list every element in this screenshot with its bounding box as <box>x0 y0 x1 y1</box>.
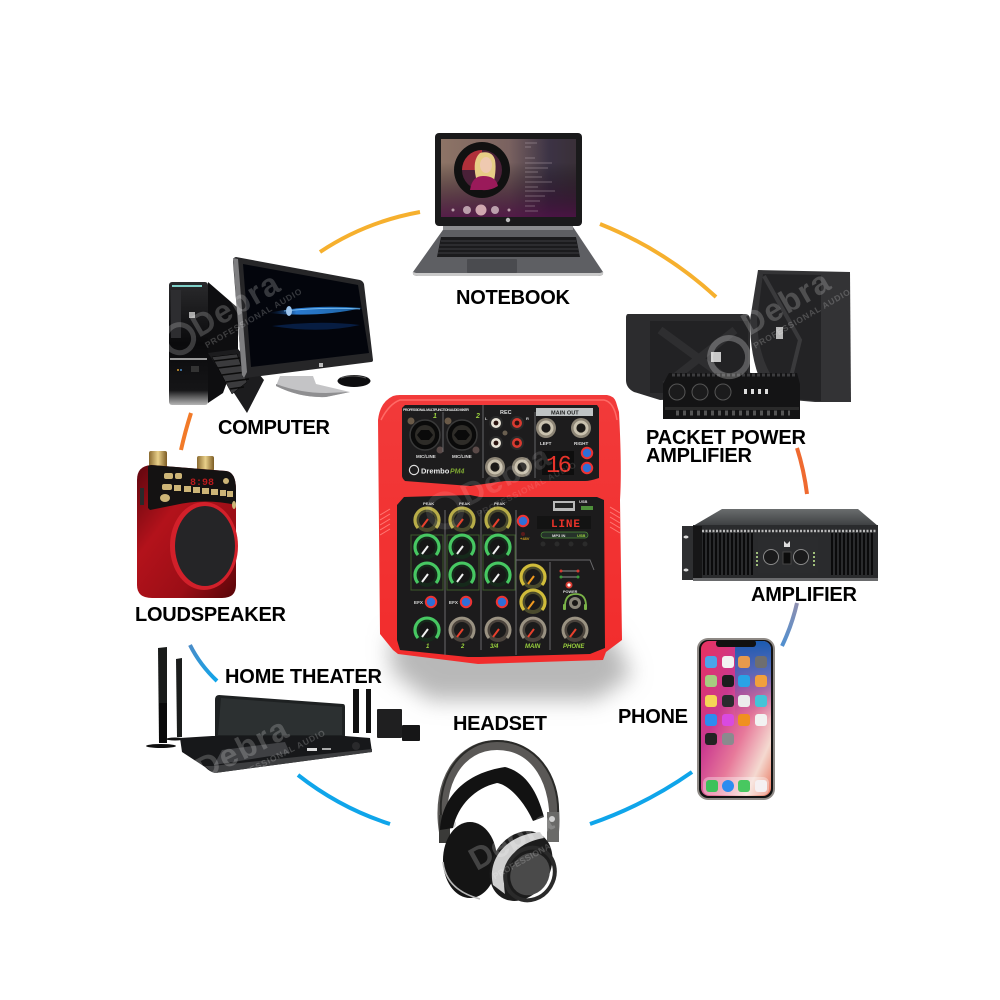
label: phone: PHONE <box>618 706 688 728</box>
headphone jack <box>563 594 587 610</box>
channel labels: 2 <box>460 644 465 650</box>
mp3 switch <box>541 532 588 538</box>
right speaker <box>750 270 851 402</box>
small buttons <box>540 542 546 546</box>
brand <box>409 465 464 476</box>
monitor screen <box>243 264 369 367</box>
watermark: PROFESSIONAL <box>491 838 557 881</box>
device: computer <box>157 257 373 413</box>
watermark: Debra <box>455 438 556 513</box>
watermark <box>157 257 304 366</box>
channel labels: 1 <box>426 644 430 650</box>
watermark <box>694 256 858 383</box>
laptop touchpad <box>467 259 517 273</box>
lower black panel: EFX <box>414 600 424 605</box>
notch <box>716 640 756 647</box>
channel knobs row 1 <box>415 508 439 532</box>
yokes <box>439 815 450 843</box>
tower front <box>169 282 208 405</box>
right ear cup <box>477 819 565 913</box>
watermark: PROFESSIONAL AUDIO <box>475 460 578 519</box>
xlr input 1 <box>408 413 444 454</box>
top black panel: MAIN OUT <box>551 410 579 416</box>
vents <box>704 533 872 575</box>
label: headset: HEADSET <box>453 713 547 735</box>
xlr input 1: 1 <box>433 413 437 420</box>
lower black panel: EFX <box>449 600 459 605</box>
arc: computer to notebook <box>320 212 420 252</box>
app grid <box>705 656 767 745</box>
arc: packet power amplifier to amplifier <box>797 448 807 494</box>
channel labels: MAIN <box>525 644 541 650</box>
track list <box>525 143 555 211</box>
left tower speakers <box>158 647 167 743</box>
line display <box>537 516 591 529</box>
label: packet power amplifier <box>646 427 807 467</box>
left speaker <box>626 314 752 400</box>
right tower speakers <box>353 689 359 733</box>
outer headband <box>442 745 554 832</box>
device: phone <box>697 638 775 800</box>
label: home theater: HOME THEATER <box>225 666 383 688</box>
amp knobs <box>669 384 685 400</box>
top black panel: LEFT <box>540 441 552 446</box>
top black panel: PROFESSIONAL MULTIFUNCTION AUDIO MIXER <box>403 408 469 412</box>
lower black panel: LINE <box>551 519 580 531</box>
device: packet power amplifier <box>626 256 858 419</box>
rec rca jacks: REC <box>500 410 512 416</box>
side slot <box>140 488 144 505</box>
receiver <box>180 736 372 773</box>
peak labels: PEAK <box>423 501 434 506</box>
amp top plate <box>693 509 878 526</box>
label: loudspeaker: LOUDSPEAKER <box>135 604 287 626</box>
laptop screen <box>435 133 582 226</box>
phone body <box>697 638 775 800</box>
laptop base <box>413 227 603 276</box>
watermark: PROFESSIONAL AUDIO <box>203 286 304 350</box>
hp logo <box>506 218 510 222</box>
clip leds <box>561 571 579 577</box>
gold knobs <box>149 451 167 469</box>
watermark: PROFESSIONAL AUDIO <box>751 287 852 351</box>
channel labels: 3/4 <box>490 644 499 650</box>
channel labels <box>426 644 585 650</box>
player buttons <box>463 206 471 214</box>
side grips <box>380 507 620 535</box>
blue button <box>517 515 529 527</box>
inner pad <box>440 767 544 830</box>
usb port <box>553 501 575 511</box>
label: notebook: NOTEBOOK <box>456 287 571 309</box>
monitor stand <box>276 376 350 397</box>
up down buttons <box>581 447 593 459</box>
lower black panel: MP3 IN <box>552 533 565 538</box>
dsp display <box>542 451 574 475</box>
xlr input 2: 2 <box>475 413 480 420</box>
amplifier head <box>663 373 800 419</box>
connection arcs ring <box>181 212 807 824</box>
main out jacks <box>536 418 556 438</box>
phantom: +48V <box>520 536 530 541</box>
label: computer: COMPUTER <box>218 417 331 439</box>
lower black panel: PEAK <box>459 501 470 506</box>
device: notebook <box>413 133 603 276</box>
monitor body <box>233 257 373 378</box>
mouse <box>338 375 370 387</box>
mic line labels: MIC/LINE <box>416 454 436 459</box>
device: amplifier <box>682 509 878 581</box>
laptop keyboard leaning <box>208 349 264 413</box>
channel labels: PHONE <box>563 644 585 650</box>
amp front panel <box>693 525 878 581</box>
arc: amplifier to phone <box>782 603 797 646</box>
divider lines <box>443 405 535 478</box>
label: packet power amplifier: AMPLIFIER <box>646 445 753 467</box>
line jacks <box>485 457 505 477</box>
main out label <box>536 408 593 416</box>
lower black panel: POWER <box>563 590 578 594</box>
channel faders row <box>415 618 439 642</box>
mixer drop shadow <box>390 635 632 700</box>
rack ears <box>682 526 695 580</box>
xlr input 2 <box>444 413 480 454</box>
lower black panel: USB <box>579 499 588 504</box>
album disc <box>454 142 510 198</box>
tower side <box>208 282 238 403</box>
brand: PM4 <box>450 468 464 476</box>
watermark: Debra <box>463 802 559 877</box>
wallpaper <box>701 641 771 796</box>
channel dividers <box>445 510 594 655</box>
lower black panel: USB <box>577 533 586 538</box>
watermark: PROFESSIONAL AUDIO <box>224 728 327 787</box>
centre control panel <box>758 537 818 573</box>
laptop keyboard <box>437 237 580 257</box>
green outlines <box>411 535 515 590</box>
device: red mixer <box>378 395 622 664</box>
watermark <box>190 696 327 796</box>
channel knobs row 2 <box>415 535 439 559</box>
arc: home theater to loudspeaker <box>190 645 217 681</box>
hp logo <box>286 306 292 316</box>
top black panel: 16 <box>546 453 572 480</box>
rec rca jacks: R <box>526 416 529 421</box>
efx buttons <box>425 596 437 608</box>
brand: Drembo <box>421 466 450 476</box>
arc: headset to home theater <box>298 775 390 824</box>
top black panel: RIGHT <box>574 441 588 446</box>
sound bar <box>215 695 345 737</box>
watermark: Debra <box>190 710 294 787</box>
watermark: Debra <box>735 263 836 342</box>
lower black panel <box>397 495 605 657</box>
arc: notebook to packet power amplifier <box>600 224 716 297</box>
device: headset <box>439 741 565 913</box>
label: packet power amplifier: PACKET POWER <box>646 427 807 449</box>
watermark <box>421 429 578 538</box>
label: amplifier: AMPLIFIER <box>751 584 858 606</box>
rec rca jacks <box>485 410 529 450</box>
black top panel <box>148 465 236 510</box>
arc: phone to headset <box>590 772 692 824</box>
top black panel <box>402 405 599 486</box>
dock <box>703 777 769 795</box>
amp switches <box>744 389 768 394</box>
subwoofer speakers <box>377 709 402 738</box>
device: loudspeaker <box>137 451 238 598</box>
channel knobs row 3 <box>415 563 439 587</box>
device: home theater <box>146 647 420 796</box>
red body <box>137 465 236 598</box>
power led <box>566 582 572 588</box>
lower black panel: PEAK <box>494 501 505 506</box>
top black panel: MIC/LINE <box>452 454 472 459</box>
left ear cup <box>443 822 497 898</box>
display and buttons: 8:98 <box>190 478 214 489</box>
rec rca jacks: L <box>485 416 488 421</box>
phone knob <box>563 618 587 642</box>
arc: loudspeaker to computer <box>181 413 191 450</box>
watermark: Debra <box>184 265 286 344</box>
red chassis <box>378 395 622 664</box>
main knobs <box>521 565 545 589</box>
speaker grille <box>170 502 238 590</box>
